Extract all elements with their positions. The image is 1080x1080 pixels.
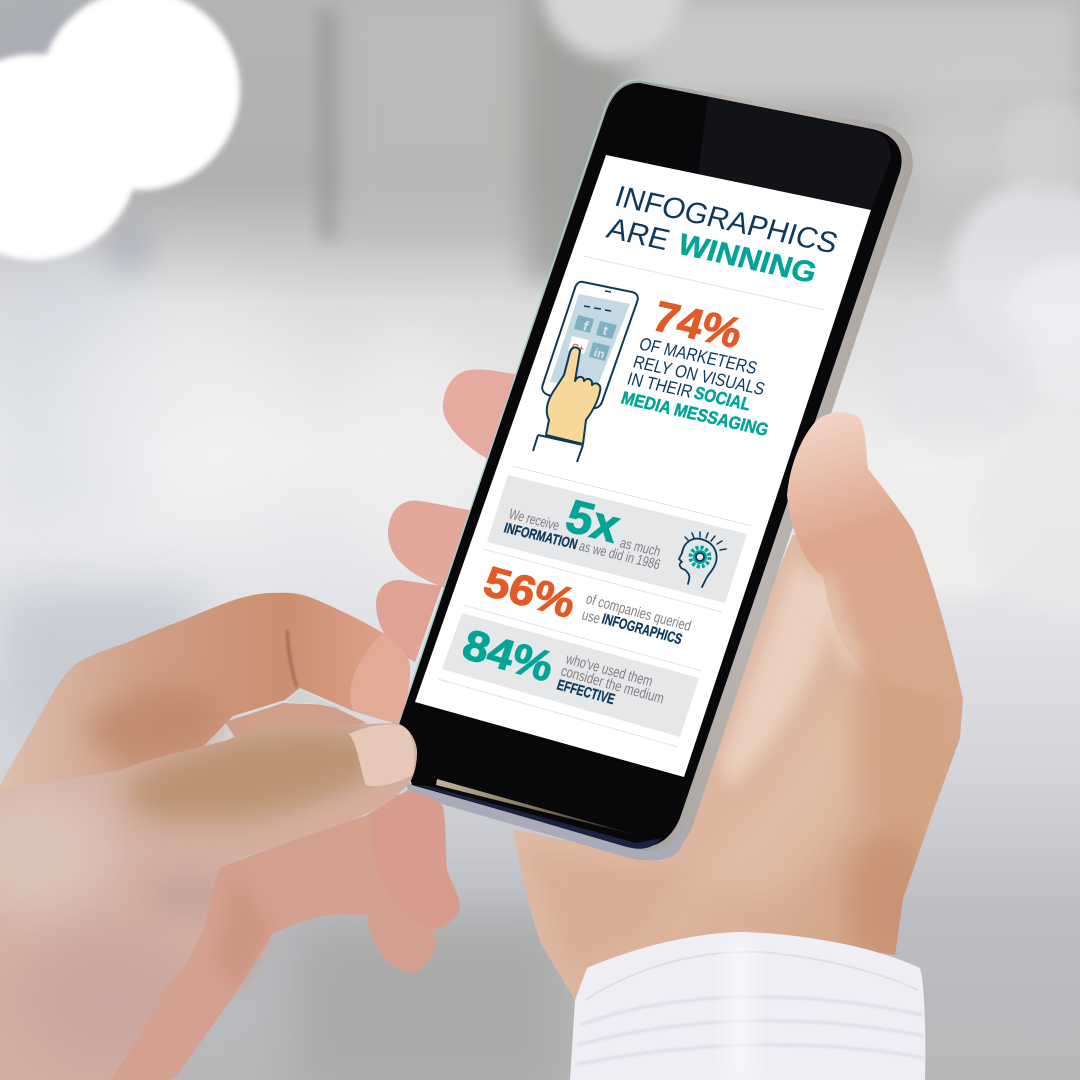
panel: 5x information: INFORMATION <box>502 521 579 553</box>
title: WINNING <box>674 228 821 290</box>
bezel reflection bottom <box>436 779 640 836</box>
stat: 56% of companies: use <box>580 607 602 627</box>
stat: 56% of companies: INFOGRAPHICS <box>600 611 684 648</box>
palm <box>513 534 963 1000</box>
icon: hand tapping phone with social apps <box>533 282 638 462</box>
stat: 74% of marketers <box>619 293 771 440</box>
left hand <box>0 593 460 1080</box>
thumbnail <box>349 724 415 786</box>
smartphone <box>396 80 913 860</box>
finger 3 <box>376 580 442 662</box>
thumb and back of hand <box>0 711 430 1080</box>
background gap between fingers <box>285 689 353 711</box>
stat: 74% of marketers: RELY ON VISUALS <box>631 352 767 399</box>
panel: 84% effective: who've used them <box>563 650 655 690</box>
bokeh: top left lights <box>0 0 240 260</box>
phone body <box>397 80 913 860</box>
panel: 84% effective: 84% <box>457 621 559 692</box>
shirt cuff <box>570 932 925 1080</box>
panel: 84% effective <box>442 613 699 737</box>
stat: 56% of companies: of companies queried <box>584 591 693 635</box>
icon: hand tapping phone with social apps: t <box>601 323 610 338</box>
right thumb over phone <box>787 412 963 699</box>
stat: 74% of marketers: IN THEIR <box>625 369 695 402</box>
stat: 74% of marketers: OF MARKETERS <box>637 334 760 378</box>
bezel reflection top <box>698 97 891 210</box>
icon: hand tapping phone with social apps: in <box>592 346 607 361</box>
finger 2 <box>388 501 475 588</box>
bokeh: right lights <box>867 100 1080 615</box>
screen background <box>415 155 871 777</box>
panel: 84% effective: consider the medium <box>559 663 666 707</box>
icon: head with gear <box>679 532 726 587</box>
panel: 5x information: 5x <box>560 490 626 552</box>
stat: 74% of marketers: MEDIA MESSAGING <box>619 388 771 440</box>
right hand: palm and curled fingers behind phone <box>376 369 980 1010</box>
stat: 56% of companies: 56% <box>478 558 581 628</box>
phone bottom metal edge <box>405 782 690 860</box>
icon: hand tapping phone with social apps: f <box>581 318 591 334</box>
finger 1 <box>443 369 515 460</box>
title: ARE <box>603 212 673 257</box>
panel: 84% effective: EFFECTIVE <box>555 677 617 708</box>
panel: 5x information <box>487 475 747 603</box>
stat: 74% of marketers: SOCIAL <box>692 383 753 414</box>
phone front glass <box>396 83 902 847</box>
stat: 56% of companies <box>478 558 693 648</box>
stat: 74% of marketers: 74% <box>647 293 748 358</box>
title: INFOGRAPHICS <box>611 180 842 260</box>
panel: 5x information: as much <box>618 536 662 560</box>
left rim highlight <box>397 80 680 728</box>
index finger and back of hand <box>0 593 410 850</box>
screen: infographic <box>415 155 871 777</box>
icon: hand tapping phone with social apps: G+ <box>570 341 585 354</box>
middle finger behind thumb <box>225 703 367 745</box>
panel: 5x information: as we did in 1986 <box>577 539 662 573</box>
lower fingers <box>110 790 460 1080</box>
panel: 5x information: We receive <box>507 507 561 534</box>
